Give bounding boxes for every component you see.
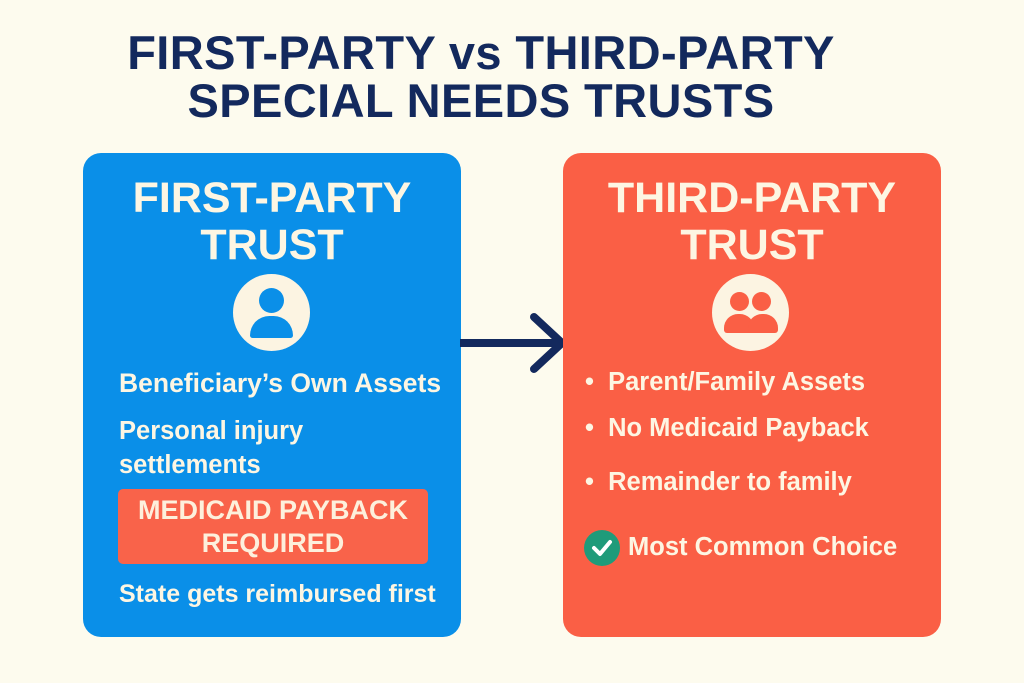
callout: medicaid payback required <box>118 489 428 564</box>
icon: check circle <box>584 530 620 566</box>
heading: first-party trust: TRUST <box>200 221 344 269</box>
heading: third-party trust: THIRD-PARTY <box>608 174 896 222</box>
bullet: no medicaid payback: • No Medicaid Payback <box>585 414 869 442</box>
icon: group of people <box>712 274 789 351</box>
icon: single person <box>233 274 310 351</box>
bullet: remainder to family: • Remainder to family <box>585 468 852 496</box>
badge: most common choice: Most Common Choice <box>628 533 897 561</box>
heading: third-party trust <box>608 174 896 269</box>
title <box>127 26 835 127</box>
badge: most common choice <box>584 530 897 566</box>
panel: third-party trust <box>563 153 941 637</box>
panel: first-party trust <box>83 153 461 637</box>
heading: third-party trust: TRUST <box>680 221 824 269</box>
text: personal injury settlements: settlements <box>119 451 261 479</box>
heading: first-party trust <box>133 174 411 269</box>
text: personal injury settlements: Personal injury <box>119 417 303 445</box>
callout: medicaid payback required: MEDICAID PAYBACK <box>138 495 408 525</box>
text: beneficiary's own assets: Beneficiary’s Own Assets <box>119 368 441 398</box>
callout: medicaid payback required: REQUIRED <box>202 528 344 558</box>
text: personal injury settlements <box>119 417 303 479</box>
title: SPECIAL NEEDS TRUSTS <box>188 74 774 127</box>
heading: first-party trust: FIRST-PARTY <box>133 174 411 222</box>
arrow <box>460 313 563 373</box>
title: FIRST-PARTY vs THIRD-PARTY <box>127 26 835 79</box>
bullet: parent/family assets: • Parent/Family Assets <box>585 368 865 396</box>
text: state gets reimbursed first: State gets reimbursed first <box>119 580 436 608</box>
